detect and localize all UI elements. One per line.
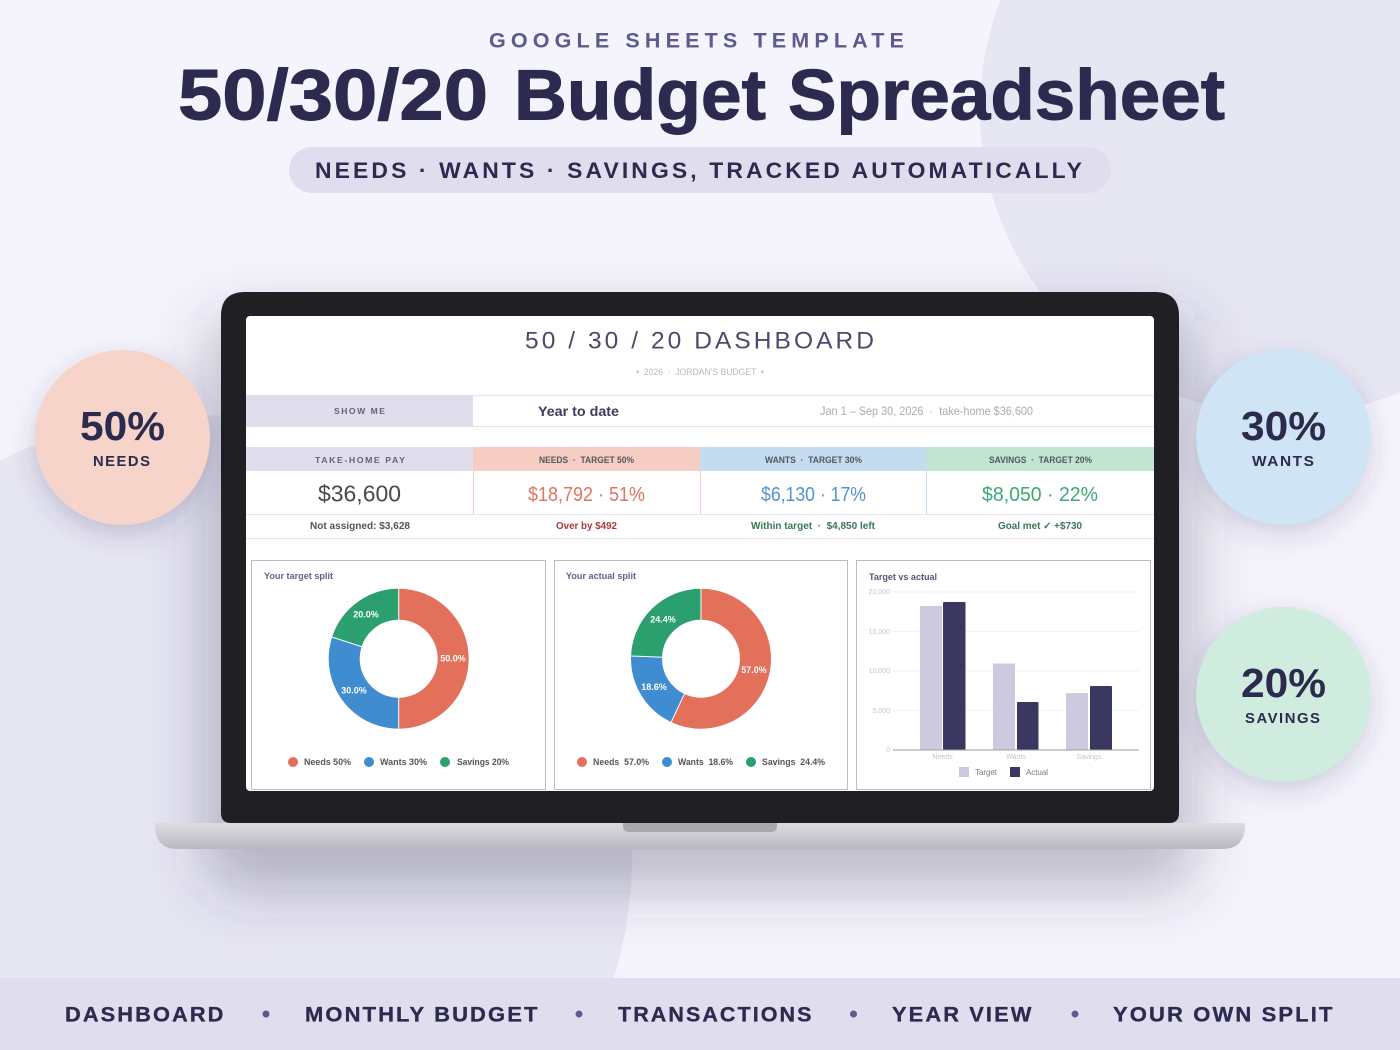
- legend: actual: Needs 57.0%: [593, 757, 649, 767]
- footer band: MONTHLY BUDGET: [305, 1004, 540, 1026]
- show me row: [246, 395, 1154, 427]
- x axis labels: Wants: [1006, 754, 1026, 761]
- legend: target: [288, 757, 509, 767]
- y axis labels: 20,000: [869, 589, 890, 596]
- donut: target: [331, 588, 466, 729]
- kpi: savings: Goal met ✓ +$730: [998, 521, 1082, 532]
- heading block: [178, 30, 1225, 193]
- legend: actual: [577, 757, 825, 767]
- show me row: Year to date: [538, 403, 619, 419]
- badge: 50% needs: 50%: [80, 403, 165, 449]
- donut: actual: 57.0%: [741, 665, 767, 675]
- chart card: target split donut: [252, 560, 546, 790]
- legend: bars: Target: [975, 768, 998, 777]
- x axis labels: Savings: [1077, 754, 1102, 761]
- kpi: wants: $6,130 · 17%: [761, 484, 866, 506]
- bars: [920, 602, 1112, 750]
- chart card: actual split donut: Your actual split: [566, 571, 636, 581]
- badge: 50% needs: [35, 350, 210, 533]
- donut: target: 50.0%: [440, 654, 466, 664]
- show me row: Jan 1 – Sep 30, 2026 · take-home $36,600: [820, 404, 1033, 418]
- laptop shadow: [205, 320, 1195, 890]
- main title: 50/30/20: [178, 56, 488, 136]
- donut: target: 30.0%: [341, 686, 367, 696]
- kpi: take-home pay: Not assigned: $3,628: [310, 521, 410, 532]
- eyebrow: google sheets template: GOOGLE SHEETS TEMPLATE: [489, 30, 909, 52]
- kpi: needs: NEEDS · TARGET 50%: [539, 455, 634, 465]
- dashboard title: 50 / 30 / 20 DASHBOARD: [525, 328, 877, 354]
- kpi: needs: $18,792 · 51%: [528, 484, 645, 506]
- show me row: SHOW ME: [334, 406, 386, 416]
- chart card: target split donut: Your target split: [264, 571, 333, 581]
- y axis labels: 15,000: [869, 629, 890, 636]
- kpi: wants: [700, 447, 927, 532]
- badge: 50% needs: NEEDS: [93, 454, 152, 470]
- legend: actual: Wants 18.6%: [678, 757, 733, 767]
- legend: target: Wants 30%: [380, 757, 427, 767]
- kpi: take-home pay: $36,600: [318, 480, 401, 506]
- x axis labels: Needs: [932, 754, 953, 761]
- badge: 20% savings: 20%: [1241, 660, 1326, 706]
- donut: actual: [630, 588, 767, 723]
- kpi: savings: SAVINGS · TARGET 20%: [989, 455, 1092, 465]
- donut: actual: 24.4%: [650, 614, 676, 624]
- footer band: YOUR OWN SPLIT: [1113, 1004, 1334, 1026]
- laptop bezel: [221, 292, 1179, 823]
- kpi: take-home pay: [246, 447, 473, 532]
- main title: [178, 56, 1225, 136]
- chart card: target vs actual bars: [856, 560, 1150, 790]
- subtitle pill: [289, 147, 1111, 193]
- donut: actual: 18.6%: [641, 682, 667, 692]
- laptop base: [155, 823, 1245, 849]
- legend: target: Needs 50%: [304, 757, 351, 767]
- hinge notch: [623, 823, 777, 832]
- legend: bars: [959, 767, 1048, 777]
- chart card: target vs actual bars: Target vs actual: [869, 572, 937, 582]
- legend: target: Savings 20%: [457, 757, 509, 767]
- kpi: needs: [473, 447, 700, 532]
- badge: 20% savings: SAVINGS: [1245, 711, 1322, 727]
- kpi: wants: WANTS · TARGET 30%: [765, 455, 862, 465]
- footer band: DASHBOARD: [65, 1004, 226, 1026]
- footer band: [0, 978, 1400, 1050]
- y axis labels: 10,000: [869, 668, 890, 675]
- footer band: TRANSACTIONS: [618, 1004, 814, 1026]
- kpi: savings: $8,050 · 22%: [982, 484, 1098, 506]
- kpi: take-home pay: TAKE-HOME PAY: [315, 455, 406, 465]
- x axis labels: [932, 754, 1102, 761]
- badge: 30% wants: [1196, 350, 1371, 533]
- kpi: needs: Over by $492: [556, 521, 617, 532]
- badge: 30% wants: 30%: [1241, 403, 1326, 449]
- legend: bars: Actual: [1026, 768, 1048, 777]
- y axis labels: 5,000: [872, 708, 890, 715]
- kpi: savings: [926, 447, 1154, 532]
- dashboard subtitle: • 2026 · JORDAN'S BUDGET •: [636, 367, 764, 377]
- footer band: YEAR VIEW: [892, 1004, 1034, 1026]
- badge: 30% wants: WANTS: [1252, 454, 1316, 470]
- screen: [246, 316, 1154, 791]
- laptop mockup: [155, 292, 1245, 890]
- legend: actual: Savings 24.4%: [762, 757, 825, 767]
- donut: target: 20.0%: [353, 610, 379, 620]
- kpi: wants: Within target · $4,850 left: [751, 521, 876, 532]
- main title: Spreadsheet: [788, 56, 1225, 136]
- chart card: actual split donut: [554, 560, 848, 790]
- badge: 20% savings: [1196, 607, 1371, 790]
- subtitle pill: NEEDS · WANTS · SAVINGS, TRACKED AUTOMATICALLY: [315, 158, 1085, 183]
- y axis labels: [869, 589, 890, 754]
- y axis labels: 0: [886, 747, 890, 754]
- main title: Budget: [514, 56, 766, 136]
